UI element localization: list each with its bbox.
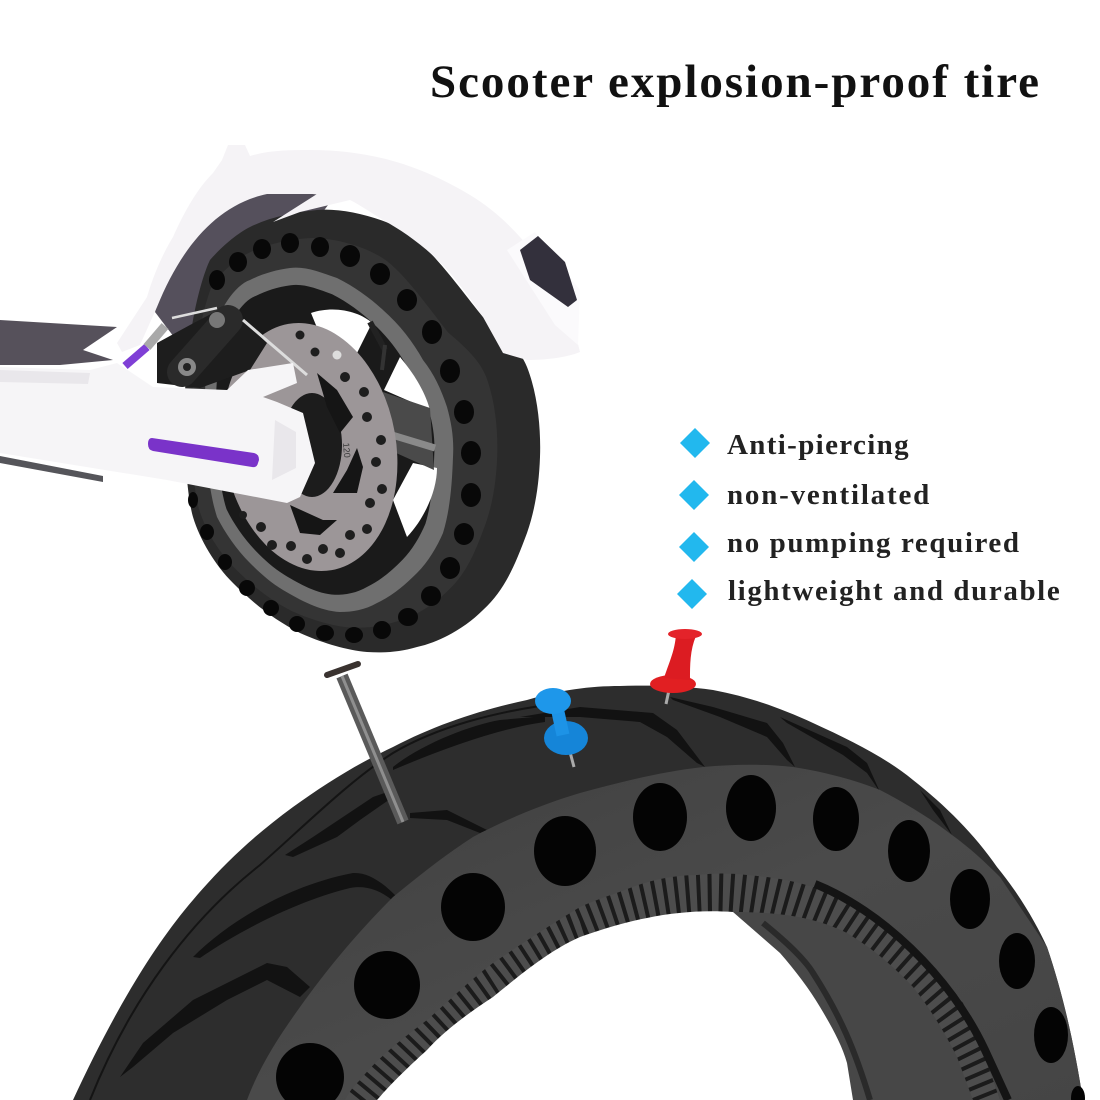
wheel openings xyxy=(311,310,437,537)
purple light strip xyxy=(148,438,259,467)
bullet diamonds xyxy=(677,428,710,609)
fender underside xyxy=(155,192,335,345)
tire holes xyxy=(188,233,481,643)
title: Scooter explosion-proof tire xyxy=(430,56,1041,108)
scooter illustration xyxy=(0,145,580,652)
cable connector xyxy=(147,326,165,347)
tail light housing xyxy=(507,232,580,345)
large solid tire xyxy=(73,686,1085,1100)
deck xyxy=(0,320,117,365)
rim interior xyxy=(216,285,434,595)
feature: non-ventilated: non-ventilated xyxy=(727,479,931,511)
disc cutouts xyxy=(290,373,363,535)
red push pin xyxy=(650,629,702,704)
purple cable xyxy=(125,347,147,366)
feature: anti-piercing: Anti-piercing xyxy=(727,429,910,461)
disc holes xyxy=(239,330,387,564)
tread grooves xyxy=(120,697,952,1077)
brake assembly xyxy=(157,305,307,388)
dark groove beside ribs xyxy=(815,884,1008,1100)
feature: no pumping: no pumping required xyxy=(727,527,1021,559)
shoulder line xyxy=(90,706,540,1100)
tire shoulder xyxy=(191,238,497,628)
inner rim side xyxy=(733,912,973,1100)
hub xyxy=(282,393,342,497)
nail xyxy=(327,664,403,822)
rim ring xyxy=(205,268,453,612)
tail light xyxy=(520,236,577,307)
sidewall band xyxy=(247,765,1083,1100)
dark underside of deck xyxy=(0,456,103,482)
disc marking: 120 xyxy=(341,442,352,458)
swing arm shading xyxy=(0,370,296,480)
ribbed inner ring xyxy=(340,860,1010,1100)
swing arm xyxy=(0,363,315,503)
rim side stripe xyxy=(763,923,870,1100)
brake disc xyxy=(204,309,416,585)
rear tire xyxy=(184,210,540,652)
tire centre opening xyxy=(377,911,853,1100)
tread xyxy=(73,686,1083,1100)
blue push pin xyxy=(535,688,588,767)
axle and spokes xyxy=(370,322,435,470)
tire holes xyxy=(276,775,1085,1100)
feature: lightweight: lightweight and durable xyxy=(728,575,1061,607)
fender xyxy=(117,145,580,360)
